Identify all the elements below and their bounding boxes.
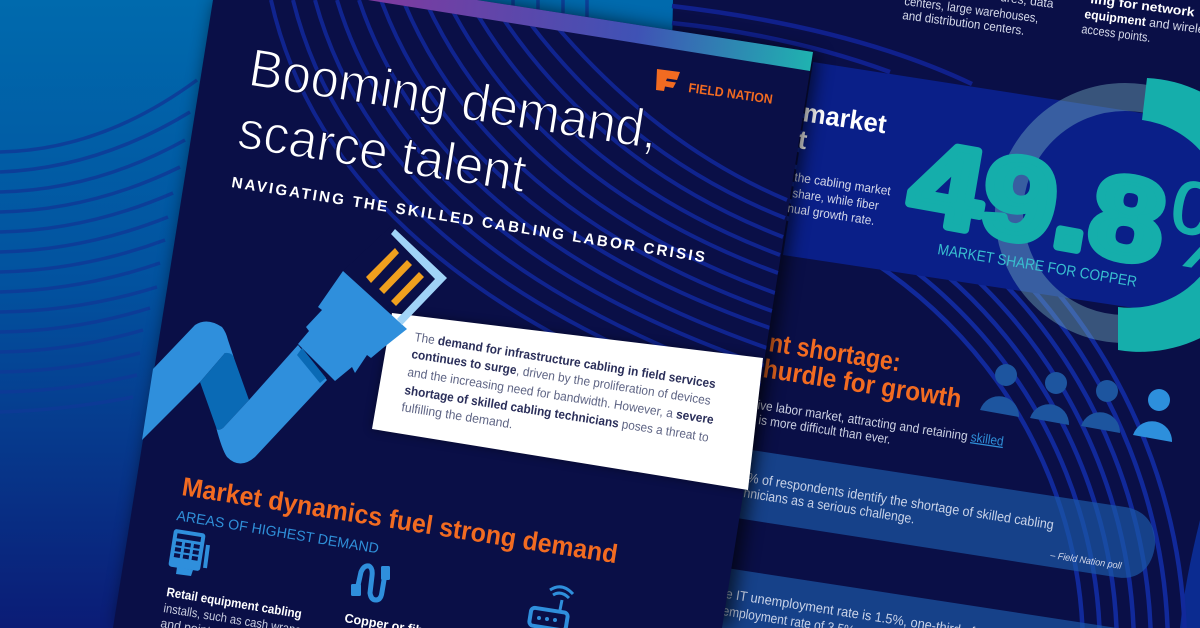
cable last segment [216,345,327,464]
top gradient strip [368,0,813,71]
title: Booming demand, [245,38,662,161]
intro text: shortage of skilled cabling technicians poses a threat to [404,383,710,445]
back page base [660,0,1200,628]
band heading: market [801,97,889,139]
person 2 [1030,372,1069,425]
poll pill [730,449,1155,578]
person 1 [980,364,1019,417]
market share band [783,62,1200,318]
band body text: share, while fiber [792,186,880,213]
cable collar [297,348,326,383]
icon: cables [351,566,390,600]
back document [672,0,1200,628]
connector boot [298,271,407,381]
background curved lines [0,0,587,412]
intro text: fulfilling the demand. [401,400,514,431]
connector contacts [366,248,424,306]
title: scarce talent [234,100,531,204]
stat caption: MARKET SHARE FOR COPPER [936,241,1138,291]
talent shortage heading: nt shortage: [767,327,903,377]
logo wordmark: FIELD NATION [688,80,774,107]
subtitle: NAVIGATING THE SKILLED CABLING LABOR CRISIS [230,174,706,266]
band heading [796,97,889,155]
back page concentric lines [786,113,1186,628]
band body text: the cabling market [794,170,892,198]
people icons [980,364,1172,442]
intro text: continues to surge, driven by the proliferation of devices [411,347,712,408]
top partial text columns: and distribution centers. [902,8,1025,38]
intro text: and the increasing need for bandwidth. However, a severe [407,365,715,427]
back page right glow [1180,520,1200,628]
intro card shadow [372,313,763,490]
front page shadow [118,0,818,628]
talent body text: ive labor market, attracting and retaining skilled [757,397,1005,449]
band heading: t [796,124,809,155]
top section of back page lines [672,6,972,84]
front page base [113,0,813,628]
donut track [1009,97,1200,329]
connector socket frame [391,229,447,325]
front page curved lines [271,0,787,422]
poll source: – Field Nation poll [1049,550,1123,572]
band body text: nual growth rate. [787,201,876,228]
market dynamics heading: Market dynamics fuel strong demand [180,471,620,569]
person 3 [1081,380,1120,433]
intro text [401,330,717,445]
connector socket background [343,226,450,325]
icon: router [529,587,573,628]
front document [113,0,813,628]
logo mark [656,69,680,91]
cable illustration [142,229,447,464]
talent shortage heading [761,327,964,414]
donut teal arc [1118,78,1200,352]
intro text: The demand for infrastructure cabling in field services [414,330,717,391]
top partial text columns [902,0,1200,45]
talent body text: is more difficult than ever. [758,412,892,447]
big stat: 49.8 [901,116,1175,289]
icon: card reader [168,529,208,576]
retail cabling text: Retail equipment cabling [166,585,303,621]
areas subheading: AREAS OF HIGHEST DEMAND [175,508,380,557]
cable first segment [142,321,234,440]
talent shortage heading: hurdle for growth [761,353,964,414]
poll text: % of respondents identify the shortage of skilled cabling [747,470,1055,532]
intro card [372,313,763,490]
band body text [787,170,892,228]
logo [656,69,774,107]
unemployment pill [710,567,1117,628]
cable fold [200,353,249,430]
highlighted person [1133,389,1172,442]
top partial text columns: access points. [1081,22,1151,45]
poll text: nnicians as a serious challenge. [743,485,916,526]
